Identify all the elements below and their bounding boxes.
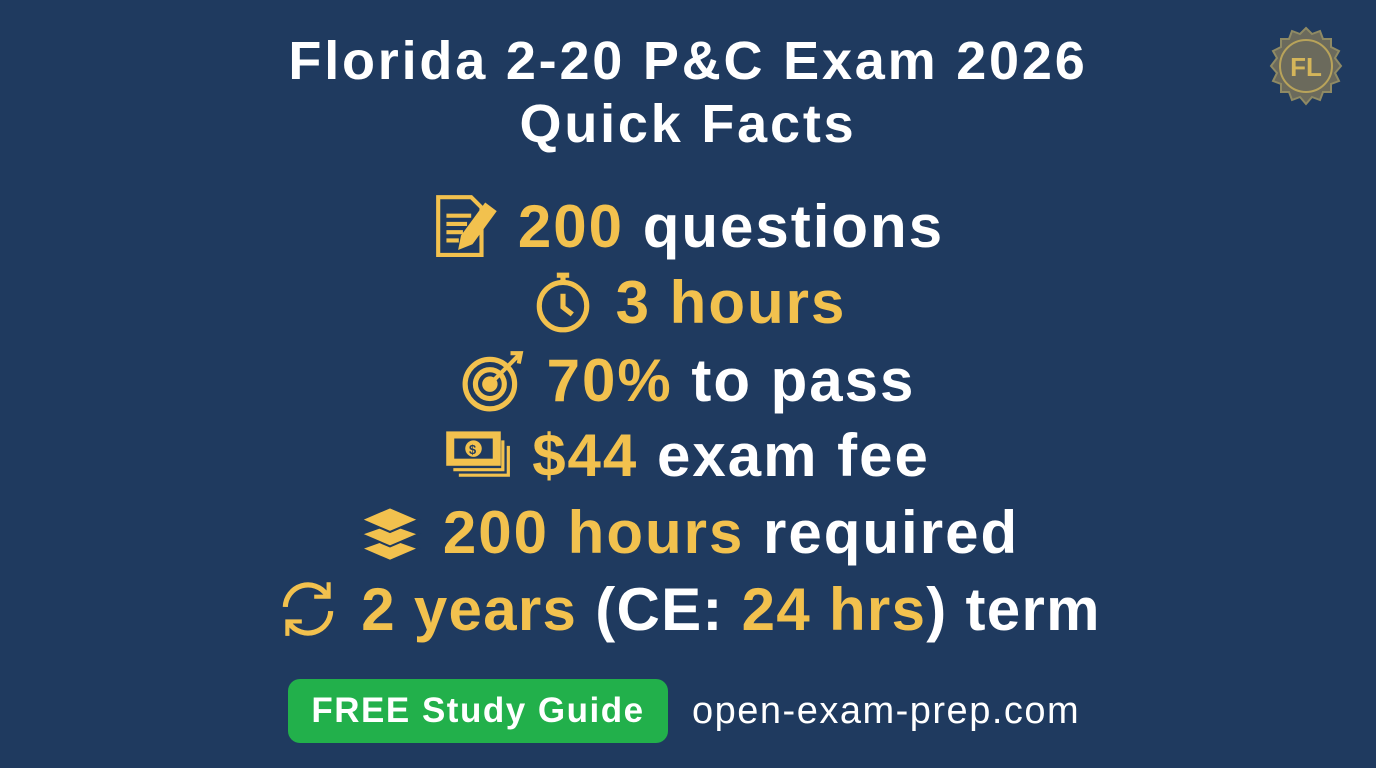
title (288, 31, 1088, 154)
icon: target (462, 351, 524, 412)
row: hours: 3 hours (616, 268, 846, 336)
footer: CTA button (288, 679, 668, 743)
row: term: 2 years (CE: 24 hrs) term (361, 576, 1101, 642)
badge: FL: FL (1290, 52, 1322, 82)
footer: url: open-exam-prep.com (692, 690, 1080, 732)
badge: FL (1270, 26, 1342, 106)
row: pass: 70% to pass (547, 346, 915, 414)
icon: stopwatch (536, 272, 590, 332)
icon: money stack: $ (469, 442, 478, 457)
title: Florida 2-20 P&C Exam 2026 (288, 31, 1088, 91)
title: Quick Facts (520, 94, 856, 154)
icon: money stack (446, 431, 510, 477)
row: education hours: 200 hours required (443, 498, 1019, 566)
icon: books (364, 508, 416, 560)
row: fee: $44 exam fee (532, 422, 930, 488)
footer: CTA button: FREE Study Guide (311, 691, 645, 730)
icon: document with pencil (436, 195, 497, 257)
icon: renew arrows (282, 582, 334, 636)
row: questions: 200 questions (518, 192, 944, 260)
